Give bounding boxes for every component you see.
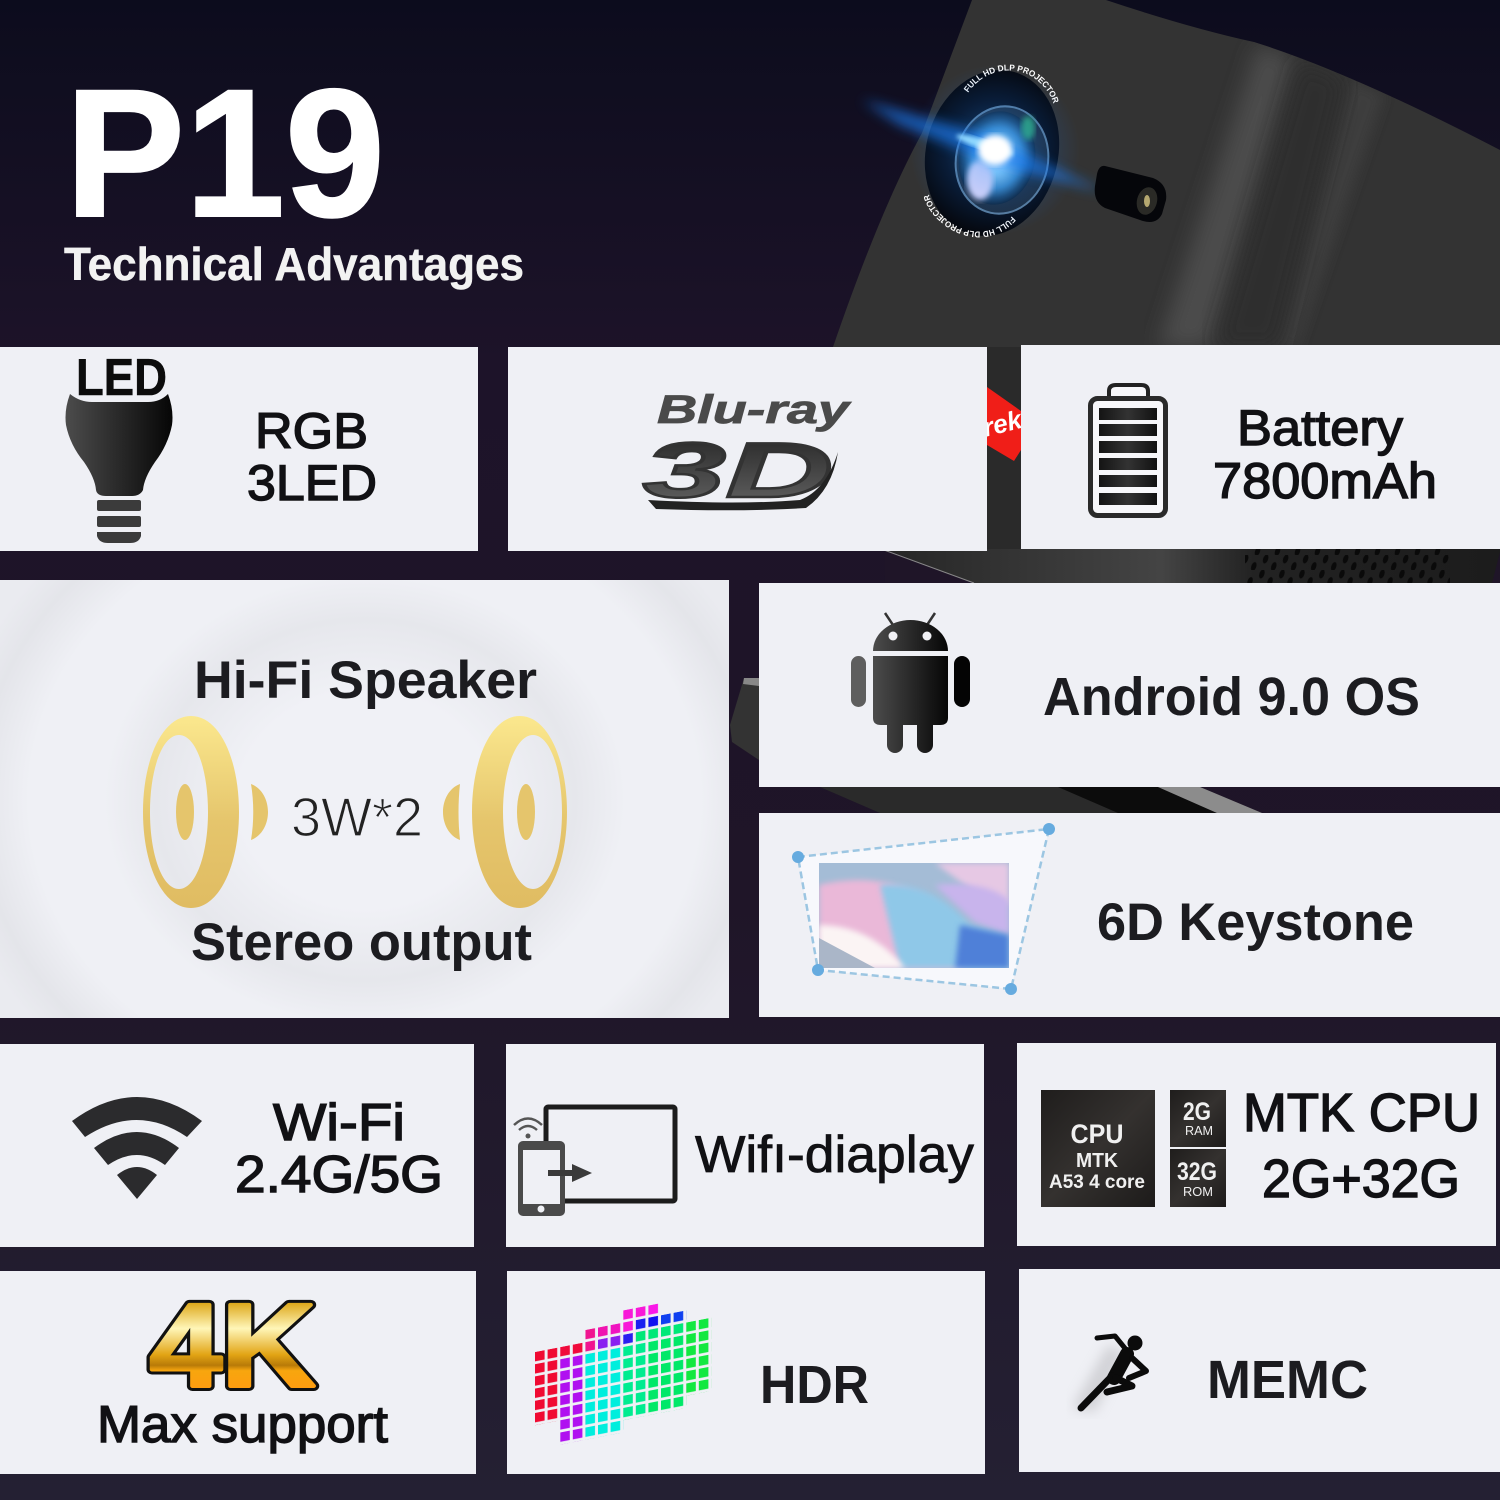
panel: 6D Keystone [759,813,1500,1017]
heading: Hi-Fi Speaker: Hi-Fi Speaker [194,651,537,710]
icon: LED bulb: LED [76,349,167,407]
icon: CPU chip [1041,1090,1155,1207]
power label: 3W*2 [291,786,423,848]
chart: HDR colour grid [535,1293,711,1450]
label: MTK CPU: MTK CPU [1243,1083,1480,1143]
icon: phone to screen [514,1107,675,1216]
label: 2.4G/5G: 2.4G/5G [235,1146,443,1204]
icon: RAM chip: RAM [1185,1123,1213,1138]
panel: Blu-ray 3D [508,347,987,551]
panel: Android [759,583,1500,787]
panel: Battery [1021,345,1500,549]
icon: runner [1072,1336,1146,1412]
panel: RGB 3LED [0,347,478,551]
logo: 4K: 4K [150,1280,315,1412]
logo: Blu-ray 3D [643,388,851,514]
icon: ROM chip: 32G [1177,1158,1217,1186]
title: P19 [65,51,385,255]
icon: left speaker [143,716,268,908]
lens assembly: FULL HD DLP PROJECTOR [964,64,1058,104]
lens assembly [862,64,1096,238]
label: Battery: Battery [1237,400,1403,456]
brand tag: rek [980,404,1026,443]
icon: right speaker [443,716,567,908]
small camera lens [1095,166,1166,222]
label: 7800mAh: 7800mAh [1213,453,1437,509]
panel: Wifi-display [506,1044,984,1247]
logo: Blu-ray 3D: 3D [643,426,833,514]
panel: Hi-Fi Speaker [0,580,729,1018]
label: HDR: HDR [760,1355,869,1415]
label: MEMC: MEMC [1207,1350,1368,1410]
projector body [730,0,1500,813]
panel: 4K [0,1271,476,1474]
icon: RAM chip: 2G [1183,1098,1211,1126]
lens assembly: FULL HD DLP PROJECTOR [924,194,1016,238]
caption: Stereo output: Stereo output [191,913,532,972]
icon: RAM chip [1170,1090,1226,1147]
icon: CPU chip: A53 4 core [1049,1172,1145,1193]
icon: keystone frame [792,823,1055,995]
icon: CPU chip: CPU [1070,1119,1124,1149]
label: 6D Keystone: 6D Keystone [1097,893,1414,952]
icon: ROM chip [1170,1149,1226,1207]
label: Android 9.0 OS: Android 9.0 OS [1043,667,1420,727]
icon: LED bulb [66,349,172,543]
panel: HDR [507,1271,985,1474]
panel: MEMC [1019,1269,1500,1472]
label: Max support: Max support [97,1396,389,1454]
icon: ROM chip: ROM [1183,1184,1213,1199]
subtitle: Technical Advantages [64,238,524,290]
label: 2G+32G: 2G+32G [1262,1149,1460,1209]
icon: wifi [72,1097,202,1199]
brand tag [987,387,1021,461]
icon: Android robot [851,613,970,753]
label: RGB: RGB [255,403,368,459]
label: 3LED: 3LED [247,455,377,511]
label: Wifi-diaplay: Wifı-diaplay [695,1126,974,1184]
icon: CPU chip: MTK [1076,1150,1119,1172]
logo: Blu-ray 3D: Blu-ray [657,388,851,432]
label: Wi-Fi: Wi-Fi [273,1094,405,1152]
panel: Wi-Fi [0,1044,474,1247]
icon: battery [1090,385,1166,516]
logo: 4K: 4K [150,1280,315,1412]
panel: MTK CPU [1017,1043,1496,1246]
